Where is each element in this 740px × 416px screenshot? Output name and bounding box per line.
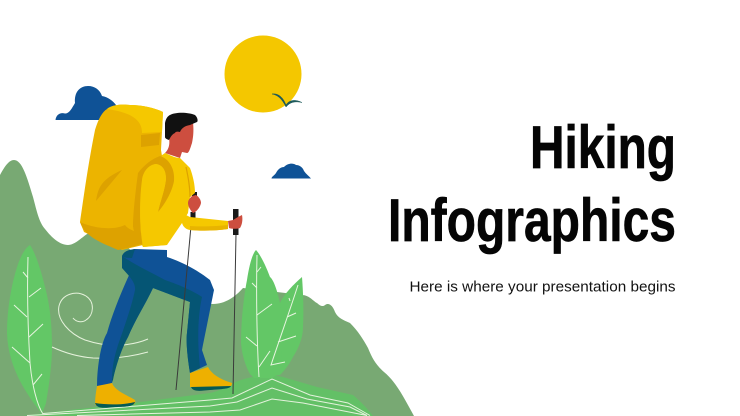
hiker: neck and face	[165, 122, 193, 158]
wind swirl lines	[52, 293, 148, 358]
title	[388, 114, 676, 254]
title: Infographics	[388, 187, 676, 254]
hiker: backpack	[80, 105, 175, 250]
hiker: front boot	[190, 367, 232, 391]
icon: sun	[224, 36, 302, 112]
hiker: hands	[188, 195, 242, 229]
hiker: legs	[97, 249, 214, 387]
hiker: front trekking pole	[233, 209, 238, 394]
hiker	[80, 105, 242, 408]
right leaves	[241, 250, 303, 378]
icon: bird	[272, 94, 302, 107]
ground contour lines	[27, 379, 370, 416]
background hill	[0, 160, 414, 416]
hiker: forward arm sleeve	[182, 214, 228, 231]
icon: right cloud	[272, 164, 311, 178]
hiker: hair	[165, 113, 198, 140]
hiker: torso	[133, 153, 195, 247]
icon: left cloud	[56, 86, 116, 120]
title: Hiking	[530, 114, 676, 181]
subtitle: Here is where your presentation begins	[410, 278, 676, 296]
hiker: rear trekking pole	[176, 192, 197, 390]
foreground ground	[24, 375, 373, 416]
left leaf	[7, 245, 52, 414]
hiker: back boot	[95, 383, 135, 408]
